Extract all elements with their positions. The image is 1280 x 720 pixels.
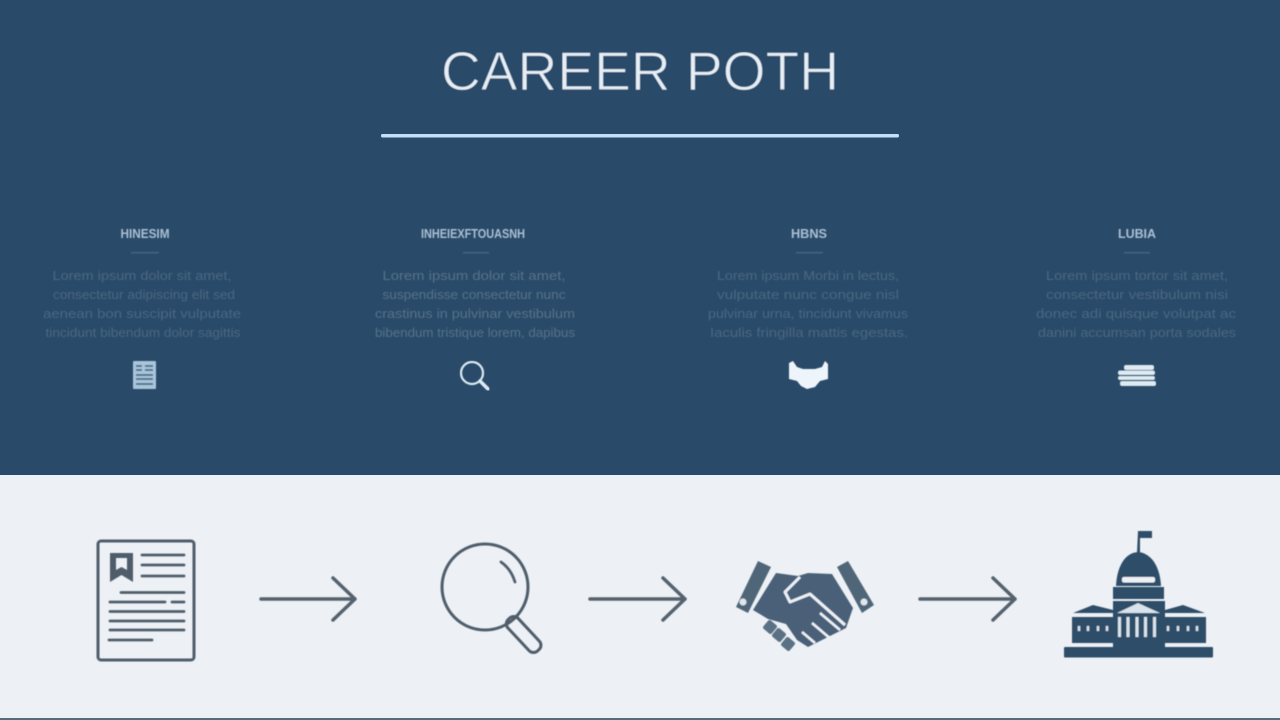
lower fingertips (762, 619, 796, 652)
windows (1079, 626, 1197, 631)
column 1 body text (43, 268, 241, 340)
icon: handshake (736, 561, 874, 652)
column 3 body text: Iaculis fringilla mattis egestas. (710, 325, 908, 340)
finger outlines (785, 577, 845, 625)
column 4 icon: small stack (1118, 365, 1156, 386)
icon: magnifying glass (442, 544, 543, 655)
panel: top dark background (0, 0, 1280, 475)
title: CAREER POTH (441, 40, 839, 102)
icon: capitol building (1064, 531, 1213, 658)
base (1064, 647, 1213, 658)
column 3 divider (796, 252, 823, 254)
column 1 body text: consectetur adipiscing elit sed (53, 287, 235, 302)
dome (1116, 552, 1161, 586)
column 1 body text: aenean bon suscipit vulputate (43, 306, 241, 321)
panel: bottom light background (0, 475, 1280, 720)
column 2 divider (463, 252, 489, 254)
column 4 body text: Lorem ipsum tortor sit amet, (1046, 268, 1228, 283)
column 4 body text: donec adi quisque volutpat ac (1036, 306, 1237, 321)
column 4: text block (1036, 227, 1237, 340)
column 4 divider (1124, 252, 1150, 254)
column 2 body text: crastinus in pulvinar vestibulum (375, 306, 575, 321)
drum (1113, 587, 1164, 599)
column 2 heading: INHEIEXFTOUASNH (421, 227, 525, 241)
column 2: text block (375, 227, 576, 340)
arrow 3 (920, 578, 1015, 620)
column 3 icon: small handshake (789, 361, 828, 389)
column 2 body text: suspendisse consectetur nunc (382, 287, 566, 302)
column 1: text block (43, 227, 241, 340)
column 2 body text (375, 268, 576, 340)
pediment (1117, 603, 1160, 613)
column 4 body text: danini accumsan porta sodales (1038, 325, 1237, 340)
column 4 heading: LUBIA (1118, 227, 1156, 241)
column 3 body text: Lorem ipsum Morbi in lectus, (717, 268, 899, 283)
column 2 icon: small magnifier (461, 362, 488, 389)
column 2 body text: Lorem ipsum dolor sit amet, (382, 268, 566, 283)
wings (1073, 605, 1205, 613)
right cuff (837, 561, 874, 613)
column 3 body text: pulvinar urna, tincidunt vivamus (708, 306, 909, 321)
column 4 body text: consectetur vestibulum nisi (1046, 287, 1228, 302)
column 3 body text: vulputate nunc congue nisl (717, 287, 899, 302)
column 1 icon: small resume (133, 361, 156, 389)
columns (1120, 617, 1154, 637)
column 3 body text (708, 268, 909, 340)
bottom edge line (0, 718, 1280, 720)
left cuff (736, 561, 771, 613)
column 4 body text (1036, 268, 1237, 340)
column 1 body text: tincidunt bibendum dolor sagittis (46, 325, 241, 340)
column 2 body text: bibendum tristique lorem, dapibus (375, 325, 576, 340)
central block (1113, 601, 1165, 647)
column 1 divider (131, 252, 159, 254)
icon: resume document (98, 541, 194, 660)
column 3: text block (708, 227, 909, 340)
flag (1137, 531, 1152, 553)
column 1 body text: Lorem ipsum dolor sit amet, (52, 268, 232, 283)
column 3 heading: HBNS (791, 227, 827, 241)
title underline (381, 134, 899, 138)
column 1 heading: HINESIM (120, 227, 170, 241)
resume text lines (109, 555, 184, 640)
clasped hands (753, 573, 853, 647)
arrow 1 (261, 578, 355, 620)
bookmark badge (110, 553, 133, 582)
arrow 2 (590, 578, 685, 620)
